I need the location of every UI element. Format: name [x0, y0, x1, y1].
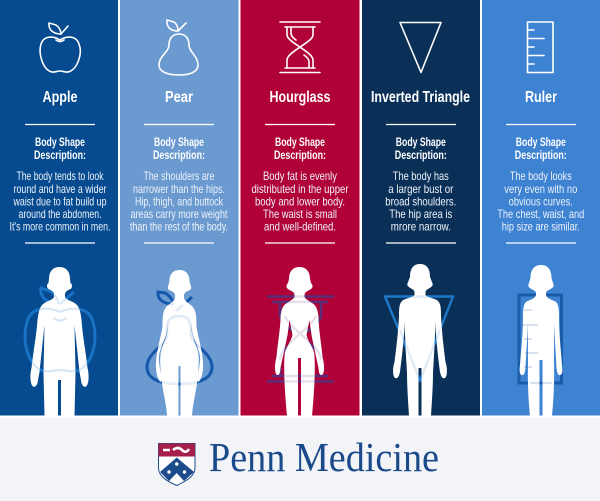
text: pear description: Body Shape	[154, 137, 204, 149]
text: apple description: round and have a wider	[14, 182, 107, 196]
heading: pear: Pear	[165, 89, 193, 106]
text: pear description: areas carry more weight	[130, 207, 228, 221]
text: ruler description: Description:	[515, 150, 567, 162]
text: ruler description: Body Shape	[516, 137, 566, 149]
text: ruler description	[497, 137, 584, 234]
figure: inverted triangle body with overlay	[385, 264, 453, 416]
text: hourglass description: and well-defined.	[264, 220, 336, 234]
text: pear description: Description:	[153, 150, 205, 162]
text: hourglass description: Body fat is evenly	[263, 169, 337, 183]
icon: ruler	[528, 22, 553, 72]
panel: pear	[120, 0, 238, 416]
text: inverted triangle description: Description:	[395, 150, 447, 162]
panel: ruler	[482, 0, 600, 416]
icon: apple	[40, 23, 80, 72]
panel: inverted triangle	[362, 0, 480, 416]
text: pear description: narrower than the hips.	[133, 182, 225, 196]
text: inverted triangle description: The body has	[393, 169, 449, 183]
figure: pear body with overlay	[147, 270, 212, 416]
text: apple description: waist due to fat build up	[13, 194, 107, 208]
text: hourglass description: The waist is small	[263, 207, 337, 221]
text: inverted triangle description: mrore narrow.	[391, 220, 451, 234]
text: ruler description: very even with no	[504, 182, 578, 196]
text: hourglass description: Body Shape	[275, 137, 325, 149]
text: pear description	[130, 137, 228, 234]
panel: apple	[0, 0, 118, 416]
icon: pear	[159, 20, 198, 75]
text: apple description: The body tends to look	[16, 169, 104, 183]
text: inverted triangle description: Body Shape	[396, 137, 446, 149]
logo text: Penn Medicine	[209, 434, 439, 480]
text: pear description: than the rest of the body.	[130, 220, 228, 234]
heading: ruler: Ruler	[525, 89, 557, 106]
text: ruler description: The body looks	[510, 169, 572, 183]
text: hourglass description: distributed in the upper	[252, 182, 348, 196]
figure: ruler body with overlay	[519, 265, 562, 416]
text: apple description: Description:	[34, 150, 86, 162]
panel: hourglass	[240, 0, 360, 416]
text: inverted triangle description: a larger bust or	[388, 182, 453, 196]
footer: Penn Medicine logo	[158, 434, 439, 486]
text: hourglass description: body and lower body.	[255, 194, 345, 208]
text: inverted triangle description: broad shoulders.	[385, 194, 456, 208]
heading: inverted triangle: Inverted Triangle	[371, 89, 470, 106]
heading: apple: Apple	[42, 89, 78, 106]
text: inverted triangle description: The hip area is	[389, 207, 452, 221]
figure: hourglass body with overlay	[267, 267, 334, 416]
text: pear description: The shoulders are	[144, 169, 215, 183]
figure: apple body with overlay	[25, 267, 95, 416]
text: hourglass description	[252, 137, 348, 234]
text: ruler description: obvious curves.	[509, 194, 573, 208]
text: apple description: around the abdomen.	[18, 207, 102, 221]
icon: hourglass	[280, 22, 320, 72]
text: apple description	[10, 137, 110, 234]
text: inverted triangle description	[385, 137, 456, 234]
icon: Penn shield	[158, 444, 195, 486]
heading: hourglass: Hourglass	[270, 89, 331, 106]
text: apple description: Body Shape	[35, 137, 85, 149]
text: apple description: It's more common in men.	[10, 220, 110, 234]
icon: inverted triangle	[400, 22, 441, 72]
text: pear description: Hip, thigh, and buttock	[135, 194, 224, 208]
text: hourglass description: Description:	[274, 150, 326, 162]
